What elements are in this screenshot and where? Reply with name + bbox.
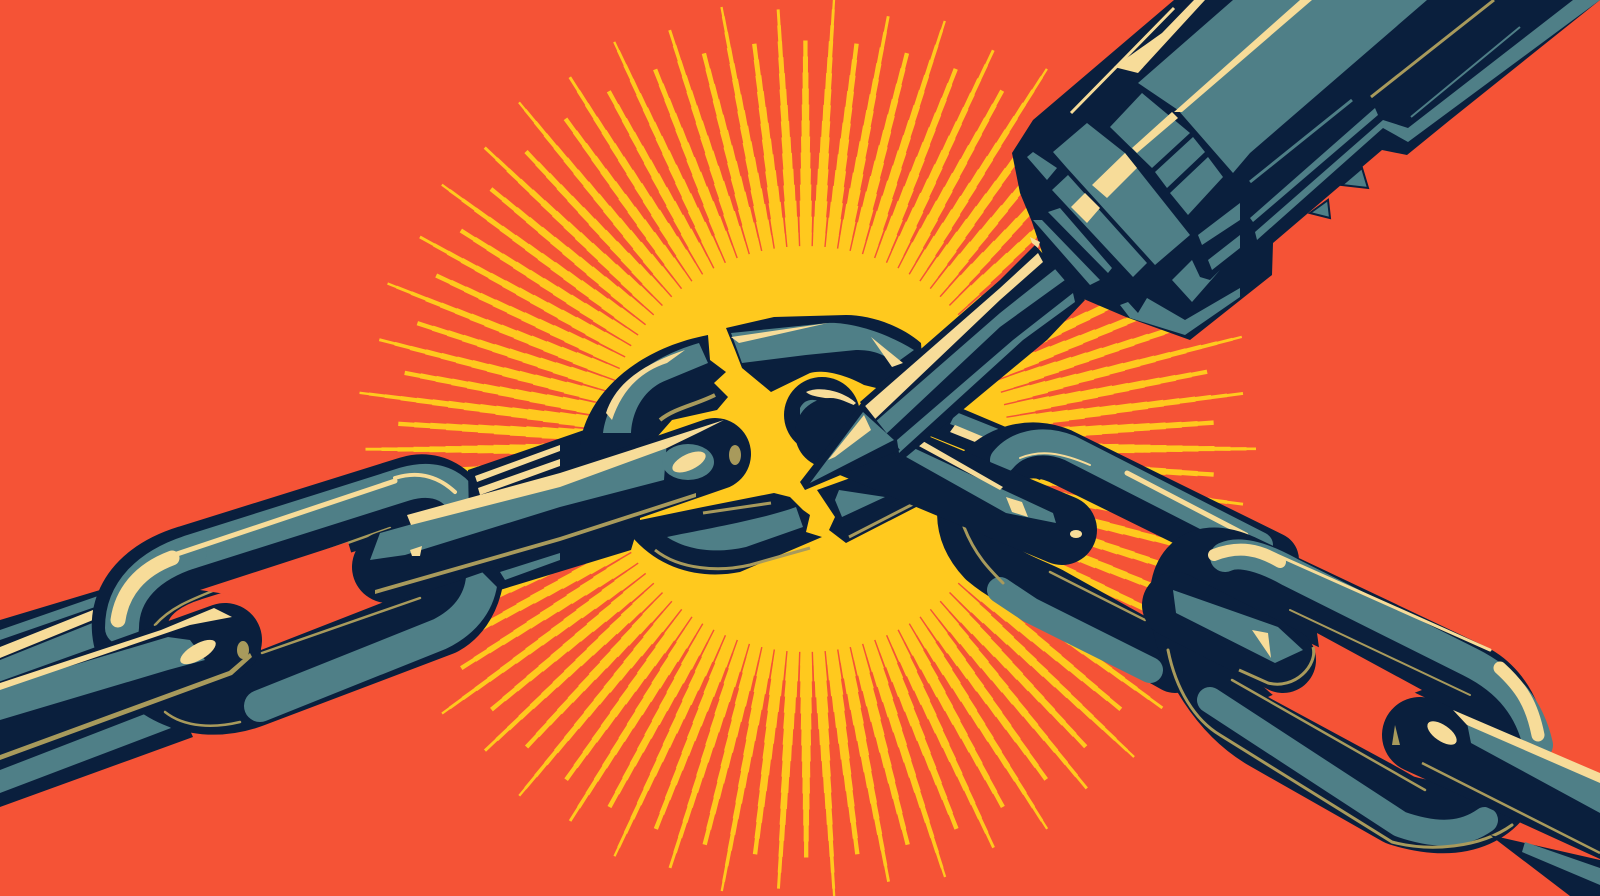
- broken link right lower piece: [817, 467, 924, 543]
- iron body outline: [1012, 0, 1600, 340]
- right chain: [726, 315, 1600, 896]
- iron bumps: [1310, 168, 1368, 218]
- iron barrel: [1071, 0, 1600, 240]
- iron collar highlight: [1030, 112, 1178, 248]
- soldering iron: [800, 0, 1600, 490]
- iron shaft: [860, 245, 1085, 462]
- back band behind right links: [915, 395, 1060, 480]
- chain link ball end: [784, 377, 860, 453]
- broken link left upper piece: [468, 335, 728, 590]
- sunburst: [361, 4, 1251, 894]
- link B open link: [118, 475, 482, 726]
- link E2 right-side open link: [964, 442, 1271, 670]
- link F front bar: [1173, 590, 1314, 684]
- link F large open link: [1168, 550, 1538, 847]
- link E front bar: [830, 433, 1082, 538]
- back link band far left: [0, 590, 193, 807]
- left chain: [0, 335, 822, 807]
- sunburst disc: [603, 246, 1009, 652]
- broken link left lower piece: [620, 493, 822, 574]
- link G front bar: [1392, 710, 1600, 853]
- sunburst rays: [361, 4, 1251, 894]
- bottom-right band: [1490, 835, 1600, 896]
- iron collar: [1027, 93, 1240, 335]
- broken link right upper piece: [726, 315, 925, 400]
- link F hole: [1268, 633, 1422, 763]
- link A front bar: [0, 608, 252, 760]
- iron tip: [800, 402, 900, 490]
- link B hole: [200, 542, 384, 650]
- link C front bar: [370, 420, 741, 594]
